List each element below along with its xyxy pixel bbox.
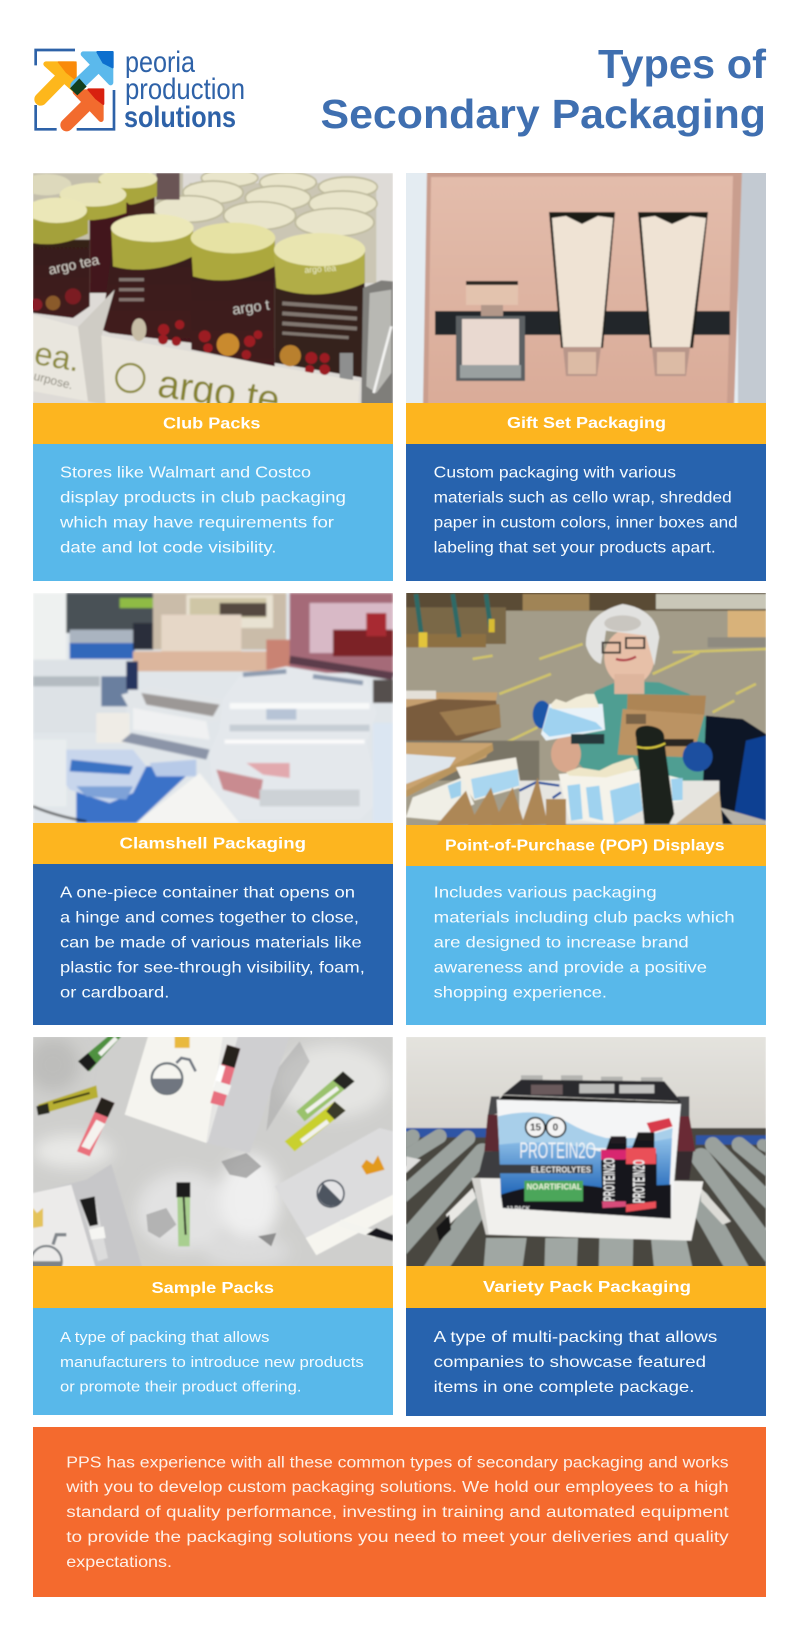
photo: variety pack on conveyor rollers: 15	[530, 1123, 542, 1134]
heading: Sample Packs	[152, 1280, 274, 1297]
person	[578, 681, 708, 782]
photo: variety pack on conveyor rollers: PROTEIN2O	[601, 1158, 618, 1201]
big clam	[270, 664, 326, 674]
photo: clear plastic clamshell containers	[33, 593, 393, 826]
description: plastic for see-through visibility, foam,	[60, 960, 365, 977]
heading: Variety Pack Packaging	[483, 1279, 691, 1296]
photo: club packs of bottled tea: argo t	[231, 298, 271, 319]
description: Stores like Walmart and Costco	[60, 464, 311, 482]
description: materials including club packs which	[434, 910, 735, 927]
blue floor	[76, 766, 196, 823]
description: companies to showcase featured	[434, 1354, 706, 1371]
description: a hinge and comes together to close,	[60, 910, 359, 927]
banner	[33, 1266, 393, 1308]
description	[33, 444, 393, 581]
held bag	[533, 701, 551, 729]
photo: club packs of bottled tea: ea.	[32, 334, 83, 378]
centre vial	[177, 1183, 190, 1246]
banner	[33, 823, 393, 864]
panel: closing statement: PPS has experience with all these common types of secondary packaging and works	[66, 1454, 729, 1471]
panel: closing statement: with you to develop custom packaging solutions. We hold our employees to a high	[65, 1479, 729, 1496]
panel: closing statement	[33, 1427, 766, 1597]
description: Includes various packaging	[434, 885, 657, 902]
right card	[275, 1128, 393, 1255]
description: Custom packaging with various	[434, 464, 676, 482]
description: materials such as cello wrap, shredded	[434, 490, 732, 506]
left bottles	[156, 173, 180, 200]
panel: closing statement: standard of quality performance, investing in training and automated equipment	[66, 1504, 729, 1521]
photo: gift set box	[404, 171, 768, 407]
panel: Clamshell Packaging	[33, 593, 393, 1025]
heading: Point-of-Purchase (POP) Displays	[445, 838, 725, 855]
glove	[683, 742, 713, 772]
photo: variety pack on conveyor rollers	[396, 1036, 776, 1278]
cardboard stack	[406, 692, 498, 707]
description: manufacturers to introduce new products	[60, 1354, 364, 1371]
right tray	[361, 280, 393, 405]
photo: variety pack on conveyor rollers: ELECTROLYTES	[531, 1165, 592, 1174]
heading: Gift Set Packaging	[507, 415, 666, 432]
cardboard flaps	[436, 777, 566, 826]
photo: club packs of bottled tea: argo te	[155, 362, 282, 422]
panel: closing statement: expectations.	[66, 1554, 172, 1571]
photo: variety pack on conveyor rollers: NOARTIFICIAL	[527, 1183, 582, 1192]
title: Secondary Packaging	[320, 91, 766, 137]
perfume	[466, 281, 518, 286]
tube 2	[638, 212, 708, 348]
photo: club packs of bottled tea	[33, 173, 393, 403]
centre clam	[120, 692, 130, 706]
description	[33, 864, 393, 1025]
description: or cardboard.	[60, 985, 169, 1002]
top card	[272, 1069, 278, 1087]
description: date and lot code visibility.	[60, 540, 276, 556]
table	[519, 781, 719, 824]
photo: perfume sample vials and cards	[26, 1036, 393, 1277]
panel: Sample Packs	[26, 1036, 393, 1415]
logo: Peoria Production Solutions	[36, 46, 245, 134]
photo: variety pack on conveyor rollers: 0	[553, 1123, 559, 1134]
description: awareness and provide a positive	[434, 960, 707, 977]
front bottles	[102, 256, 193, 344]
description	[406, 444, 766, 581]
heading: Clamshell Packaging	[120, 836, 306, 853]
banner	[406, 825, 766, 866]
pink vial left	[76, 1111, 108, 1157]
left box	[406, 742, 493, 791]
white blue packs	[456, 757, 521, 801]
logo wordmark: solutions	[124, 101, 236, 134]
logo wordmark: production	[125, 73, 245, 106]
panel: Point-of-Purchase (POP) Displays	[406, 591, 766, 1025]
wrap	[497, 1100, 681, 1219]
description	[406, 1308, 766, 1416]
left card	[33, 1164, 143, 1270]
boxes	[33, 315, 88, 401]
description: paper in custom colors, inner boxes and	[434, 514, 738, 532]
logo wordmark	[124, 46, 245, 134]
description: display products in club packaging	[60, 490, 346, 506]
tray	[472, 1178, 703, 1241]
description: A one-piece container that opens on	[60, 885, 355, 902]
description: shopping experience.	[434, 985, 607, 1002]
left clams	[33, 660, 67, 667]
description: can be made of various materials like	[60, 935, 362, 952]
icon: logo mark with arrows	[36, 50, 114, 129]
photo: worker assembling display packs	[406, 591, 766, 831]
photo: club packs of bottled tea: argo tea	[304, 263, 337, 275]
brand: PROTEIN2O	[519, 1138, 596, 1163]
heading: Club Packs	[163, 416, 261, 432]
black bottle	[635, 726, 674, 824]
title: Types of	[598, 41, 766, 87]
panel: closing statement: to provide the packaging solutions you need to meet your deliveries and quality	[66, 1529, 729, 1546]
ribbon	[435, 311, 730, 335]
description: labeling that set your products apart.	[434, 540, 716, 556]
photo: variety pack on conveyor rollers: 12 PACK	[507, 1206, 530, 1213]
back rows	[190, 183, 376, 283]
right vials	[296, 1073, 345, 1122]
description	[406, 866, 766, 1025]
description: items in one complete package.	[434, 1379, 694, 1396]
pink vial centre	[210, 1063, 236, 1107]
banner	[406, 1266, 766, 1308]
bottles behind	[521, 1075, 543, 1085]
rollers	[396, 1136, 776, 1278]
chair	[703, 716, 766, 824]
description	[33, 1308, 393, 1415]
description: A type of packing that allows	[60, 1329, 269, 1346]
description: or promote their product offering.	[60, 1379, 302, 1396]
description: are designed to increase brand	[434, 935, 689, 952]
panel: Variety Pack Packaging	[396, 1036, 776, 1416]
photo: variety pack on conveyor rollers: PROTEIN2O	[629, 1160, 648, 1203]
panel: Gift Set Packaging	[404, 171, 768, 581]
photo: club packs of bottled tea: argo tea	[47, 251, 101, 278]
photo: club packs of bottled tea: urpose.	[32, 369, 74, 392]
banner	[33, 403, 393, 444]
title	[320, 41, 766, 137]
green vial top	[88, 1037, 122, 1072]
box	[627, 694, 706, 715]
logo wordmark: peoria	[125, 46, 195, 79]
description: which may have requirements for	[59, 514, 335, 532]
description: A type of multi-packing that allows	[434, 1329, 717, 1346]
banner	[406, 403, 766, 444]
bottles on pack	[601, 1138, 629, 1207]
yellow vial	[38, 1085, 98, 1115]
top of pack	[503, 1080, 681, 1101]
tube 1	[549, 212, 615, 348]
panel: Club Packs	[21, 169, 393, 581]
badges	[526, 1118, 545, 1137]
